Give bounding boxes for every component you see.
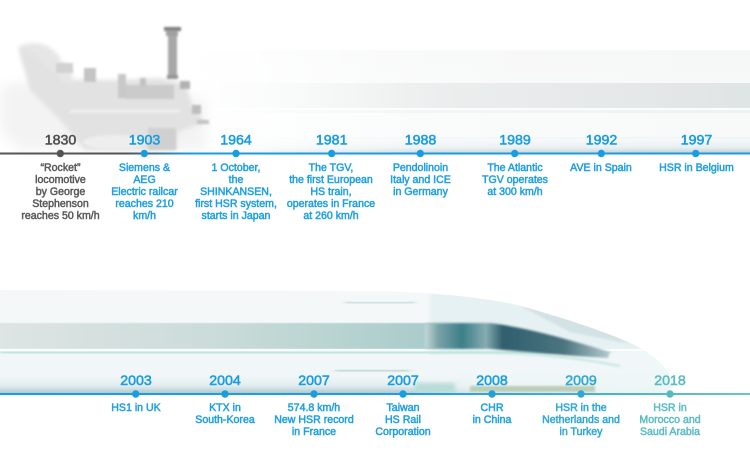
milestone 1830: 1830 (45, 132, 76, 148)
milestone 1989: TGV operates (482, 174, 548, 186)
milestone 1830: reaches 50 km/h (21, 210, 100, 222)
milestone 1989: at 300 km/h (487, 186, 543, 198)
milestone 1830: by George (36, 186, 85, 198)
milestone 1988: Italy and ICE (390, 174, 451, 186)
icon: steam locomotive (0, 27, 209, 150)
milestone 1964: SHINKANSEN, (200, 186, 272, 198)
milestone 1992: AVE in Spain (570, 162, 632, 174)
milestone 1903: Electric railcar (111, 186, 178, 198)
milestone 2004: 2004 (209, 373, 241, 389)
milestone 2007 record: 574.8 km/h (288, 402, 340, 414)
milestone 2008: in China (473, 414, 512, 426)
milestone 1903: AEG (133, 174, 156, 186)
milestone 2009: 2009 (565, 373, 597, 389)
milestone 2007 record: 2007 (298, 373, 330, 389)
milestone 1988: Pendolinoin (393, 162, 448, 174)
milestone 1988: 1988 (405, 132, 436, 148)
milestone 2004: KTX in (209, 402, 241, 414)
milestone 2009: Netherlands and (542, 414, 620, 426)
milestone 1981: at 260 km/h (303, 210, 359, 222)
milestone 1981 (287, 132, 375, 222)
milestone 2009: HSR in the (555, 402, 607, 414)
milestone 2003: 2003 (120, 373, 152, 389)
milestone 1903: km/h (133, 210, 156, 222)
milestone 2003: HS1 in UK (111, 402, 161, 414)
milestone 1830: locomotive (35, 174, 86, 186)
milestone 2007 record: in France (292, 426, 336, 438)
milestone 1981: operates in France (287, 198, 375, 210)
milestone 1997: HSR in Belgium (659, 162, 734, 174)
milestone 2007 record (274, 373, 354, 438)
milestone 1964: 1 October, (212, 162, 260, 174)
milestone 2018 (639, 373, 701, 438)
milestone 2018: HSR in (653, 402, 687, 414)
milestone 1830: Stephenson (32, 198, 89, 210)
milestone 1964: starts in Japan (202, 210, 271, 222)
milestone 1992 (570, 132, 632, 174)
milestone 2008 (473, 373, 512, 426)
milestone 2007 record: New HSR record (274, 414, 354, 426)
milestone 1981: 1981 (316, 132, 348, 148)
milestone 1988: in Germany (393, 186, 449, 198)
train windows (425, 323, 610, 358)
milestone 2009: in Turkey (560, 426, 603, 438)
milestone 1989: 1989 (499, 132, 531, 148)
milestone 1981: The TGV, (309, 162, 353, 174)
milestone 1903: 1903 (129, 132, 160, 148)
milestone 1964: first HSR system, (195, 198, 277, 210)
milestone 1903 (111, 132, 178, 222)
milestone 2003 (111, 373, 161, 414)
milestone 1903: reaches 210 (115, 198, 174, 210)
milestone 1997 (659, 132, 734, 174)
milestone 1903: Siemens & (119, 162, 170, 174)
milestone 2008: CHR (481, 402, 504, 414)
milestone 1989: The Atlantic (487, 162, 543, 174)
milestone 2004 (195, 373, 255, 426)
milestone 1830 (21, 132, 100, 222)
milestone 1981: HS train, (310, 186, 352, 198)
milestone 1988 (390, 132, 451, 198)
icon: locomotive chimney (164, 27, 181, 79)
milestone 1964 (195, 132, 277, 222)
milestone 2018: 2018 (654, 373, 686, 389)
milestone 1964: the (229, 174, 243, 186)
milestone 2018: Morocco and (639, 414, 701, 426)
milestone 2007 Taiwan: Corporation (375, 426, 431, 438)
milestone 1997: 1997 (681, 132, 712, 148)
milestone 1964: 1964 (220, 132, 252, 148)
milestone 1989 (482, 132, 548, 198)
milestone 2007 Taiwan: 2007 (387, 373, 419, 389)
milestone 1992: 1992 (586, 132, 617, 148)
milestone 2004: South-Korea (195, 414, 255, 426)
milestone 2007 Taiwan (375, 373, 431, 438)
top timeline axis (0, 152, 750, 154)
milestone 2007 Taiwan: HS Rail (385, 414, 421, 426)
milestone 2008: 2008 (476, 373, 508, 389)
milestone 1830: “Rocket” (40, 162, 81, 174)
milestone 2018: Saudi Arabia (640, 426, 700, 438)
milestone 2009 (542, 373, 620, 438)
top blurred train background (180, 50, 750, 153)
bottom timeline axis (0, 393, 750, 395)
high-speed train (0, 290, 673, 393)
milestone 1981: the first European (289, 174, 373, 186)
milestone 2007 Taiwan: Taiwan (387, 402, 420, 414)
